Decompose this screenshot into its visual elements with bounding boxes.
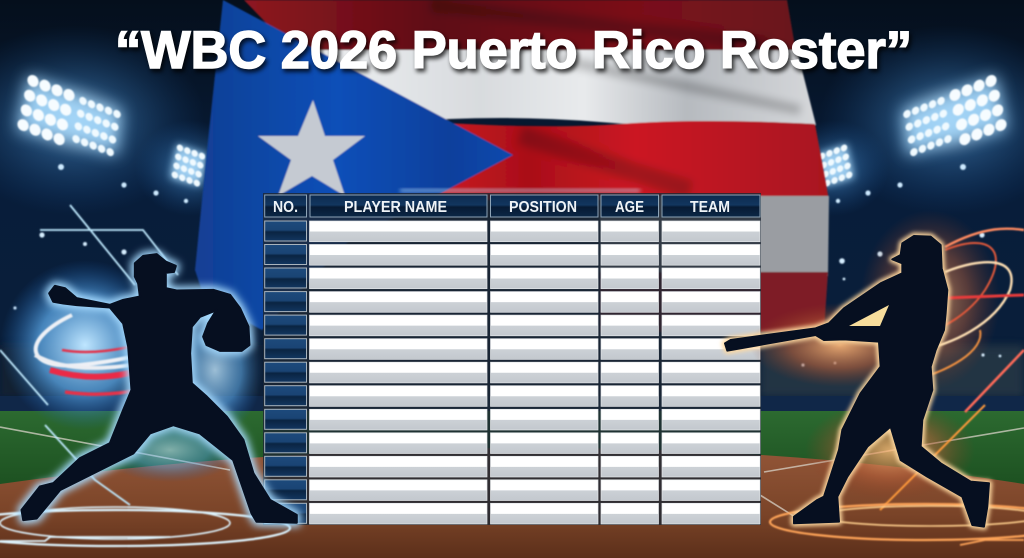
title: “WBC 2026 Puerto Rico Roster” bbox=[115, 21, 912, 80]
header row: POSITION bbox=[509, 199, 577, 216]
glare line bbox=[400, 189, 640, 192]
gap between batter's arms bbox=[849, 305, 889, 326]
batter silhouette bbox=[725, 236, 989, 527]
blue aura bbox=[0, 260, 170, 430]
pitcher with blue glow bbox=[0, 205, 297, 546]
flag red stripe bbox=[400, 120, 829, 200]
flag shadow folds bbox=[430, 5, 800, 190]
mound rings bbox=[0, 507, 290, 546]
roster table bbox=[263, 193, 761, 525]
home plate rings bbox=[770, 504, 1024, 545]
header row: AGE bbox=[615, 199, 644, 216]
flag lower white stripe bbox=[600, 196, 829, 276]
flag top red stripe bbox=[244, 0, 797, 58]
flag star bbox=[258, 100, 365, 196]
orange aura bbox=[750, 303, 930, 387]
pitch swirl bbox=[35, 315, 190, 394]
roster rows bbox=[265, 221, 760, 524]
title: “WBC 2026 Puerto Rico Roster” bbox=[117, 24, 914, 83]
flag blue triangle bbox=[195, 0, 513, 330]
header row: NO. bbox=[273, 199, 298, 216]
table backing bbox=[263, 193, 761, 525]
crowd stands bbox=[0, 345, 1024, 413]
flag lower red stripe bbox=[600, 272, 828, 332]
header row bbox=[265, 195, 760, 217]
flag white stripe bbox=[300, 50, 816, 127]
header row: TEAM bbox=[690, 199, 730, 216]
foul lines bbox=[0, 427, 1024, 520]
infield dirt bbox=[0, 448, 1024, 558]
electric lines bbox=[0, 205, 178, 505]
pitcher outer glow bbox=[22, 254, 297, 523]
batter with orange glow bbox=[725, 210, 1024, 545]
sparkles bbox=[13, 232, 1001, 367]
header row: PLAYER NAME bbox=[344, 199, 447, 216]
stadium lights left bbox=[0, 25, 245, 216]
grass field bbox=[0, 411, 1024, 491]
Puerto Rico flag bbox=[195, 0, 829, 332]
batter outer glow bbox=[725, 236, 989, 527]
stadium lights right bbox=[779, 25, 1024, 216]
swing streaks bbox=[880, 229, 1024, 510]
pitcher silhouette bbox=[22, 254, 297, 523]
